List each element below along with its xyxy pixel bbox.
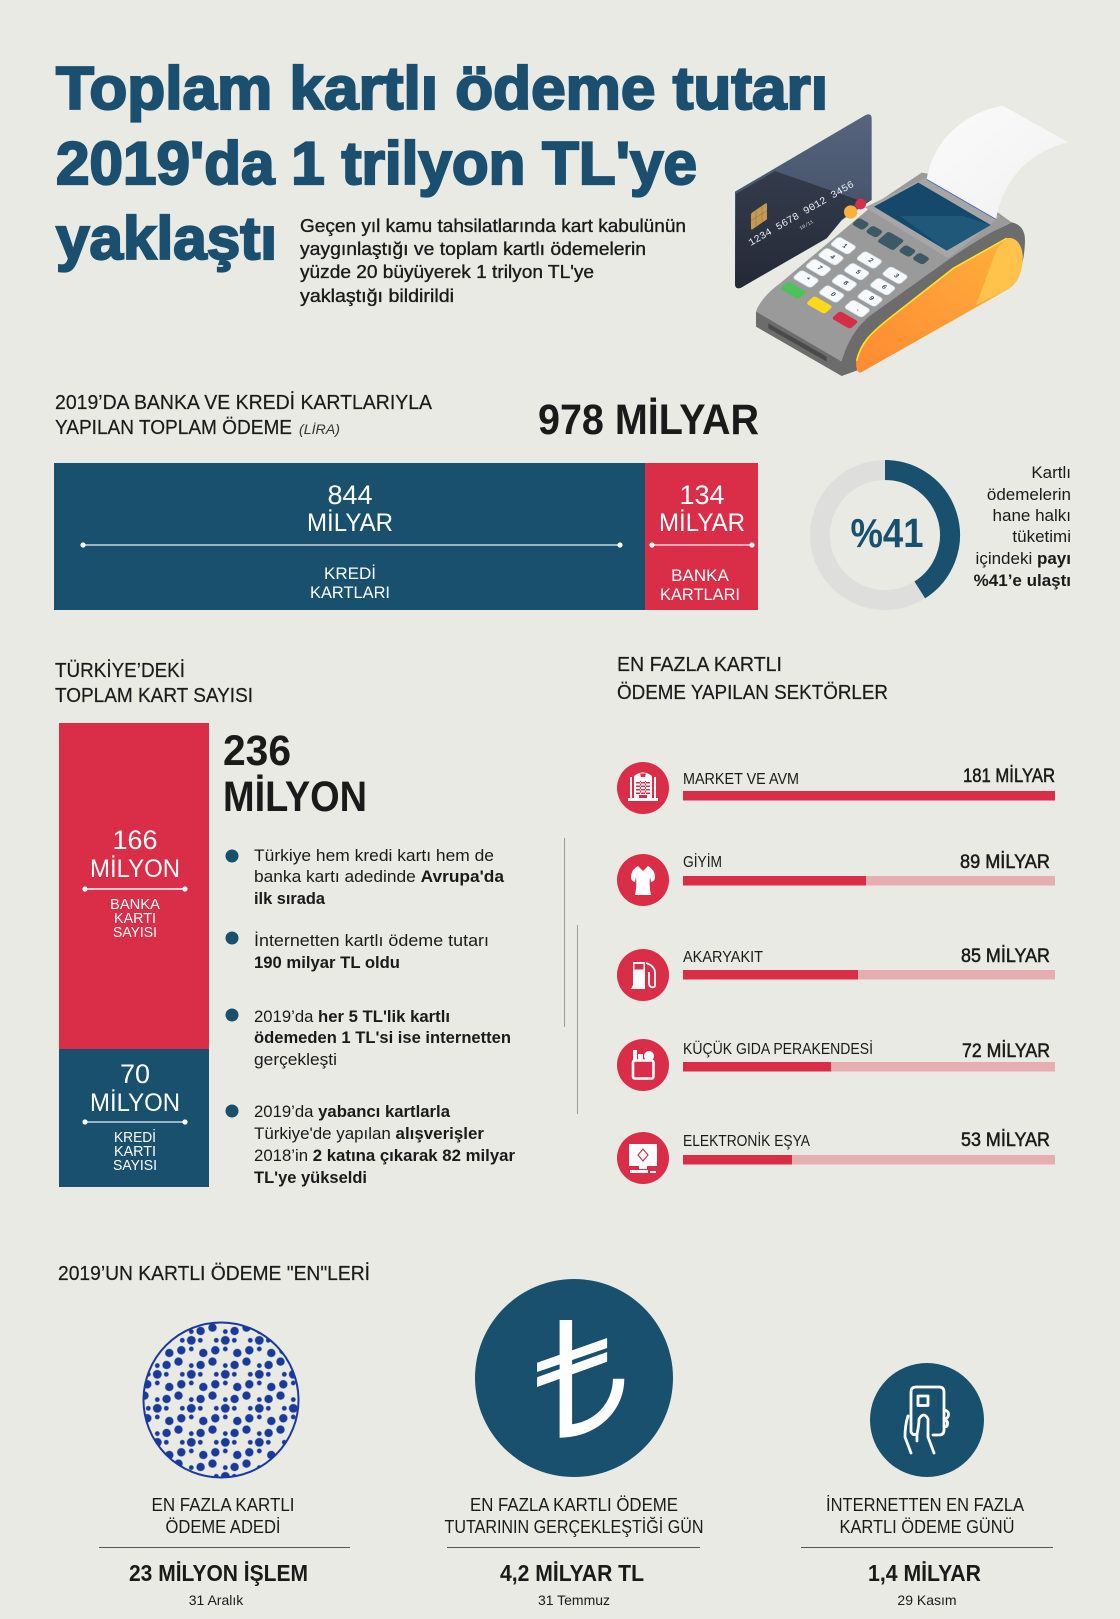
debit card count: 166 [112,825,158,855]
debit card segment label: BANKA [671,566,729,585]
sector: fuel [617,946,1055,1001]
credit card count: KARTI [114,1143,156,1160]
sector: small food retail: 72 MİLYAR [962,1041,1050,1062]
sector: fuel: 85 MİLYAR [961,946,1050,967]
credit card count: SAYISI [113,1157,157,1174]
function keys [851,218,930,265]
heading: total cards: TÜRKİYE’DEKİ [55,659,185,682]
credit card: 1234 5678 9012 3456 [747,179,856,249]
donut chart: 41% [820,470,950,600]
credit card count [82,1059,188,1174]
key digits [803,243,901,312]
credit card segment label: KARTLARI [310,583,390,602]
sector: clothing [617,852,1055,906]
record: internet payments: 1,4 MİLYAR [868,1560,981,1586]
credit card segment label: MİLYAR [307,508,393,537]
record: highest amount: 4,2 MİLYAR TL [500,1560,644,1586]
bullet 4: Türkiye'de yapılan alışverişler [254,1124,484,1143]
bullet 4: 2019’da yabancı kartlarla [254,1102,451,1121]
record: highest amount: EN FAZLA KARTLI ÖDEME [470,1495,678,1515]
heading: records of 2019: 2019’UN KARTLI ÖDEME "EN"LERİ [58,1262,370,1285]
credit card [735,114,872,288]
number keys [793,237,908,318]
record: internet payments: 29 Kasım [897,1592,957,1608]
heading: total cards: TOPLAM KART SAYISI [55,685,253,707]
title: Toplam kartlı ödeme tutarı [56,55,828,122]
record: most transactions: 31 Aralık [189,1592,244,1608]
record: highest amount: TUTARININ GERÇEKLEŞTİĞİ GÜN [444,1516,704,1537]
bullet 2 [226,931,489,972]
terminal body [756,173,1025,376]
debit card count [82,825,188,941]
orange grip [856,238,1023,373]
icon: lira symbol [475,1279,673,1477]
sector: market: 181 MİLYAR [963,766,1055,787]
icon: building [617,762,669,814]
heading: total payment: (LİRA) [299,421,340,437]
total cards value: 236 [223,727,291,775]
key digits: 4 [828,254,837,261]
bullet 3: gerçekleşti [254,1050,337,1069]
sector: electronics: 53 MİLYAR [961,1130,1050,1151]
key digits: 7 [815,265,824,272]
icon: hand holding phone [870,1363,984,1477]
donut caption: ödemelerin [987,485,1071,504]
bullet 1: ilk sırada [254,889,326,908]
intro text: yaygınlaştığı ve toplam kartlı ödemelerin [300,239,646,259]
credit card segment label [80,480,623,602]
intro text: yaklaştığı bildirildi [300,286,454,306]
record: internet payments: İNTERNETTEN EN FAZLA [826,1495,1024,1515]
total value: 978 MİLYAR [538,396,759,444]
icon: dotted circle [140,1320,302,1480]
key digits: 5 [854,269,862,276]
debit card segment label: 134 [679,480,725,510]
credit card count: MİLYON [90,1088,180,1117]
debit card segment label: KARTLARI [660,585,740,604]
bullet 4: 2018’in 2 katına çıkarak 82 milyar [254,1146,515,1165]
heading: total payment: 2019’DA BANKA VE KREDİ KARTLARIYLA [55,391,433,414]
key digits: 8 [841,280,850,287]
sector: electronics [617,1130,1055,1184]
debit card segment label: MİLYAR [659,508,745,537]
bullet 3: 2019’da her 5 TL'lik kartlı [254,1007,450,1026]
intro text [300,216,686,306]
heading: sectors: ÖDEME YAPILAN SEKTÖRLER [617,682,888,704]
debit card count: MİLYON [90,854,180,883]
key digits: 0 [829,291,837,298]
donut caption: %41’e ulaştı [974,571,1071,590]
donut caption: hane halkı [993,506,1071,525]
heading: total payment: YAPILAN TOPLAM ÖDEME [55,417,292,439]
donut caption: tüketimi [1012,527,1071,546]
coloured keys [780,281,858,329]
sector: market: MARKET VE AVM [683,771,799,788]
bullet 3: ödemeden 1 TL'si ise internetten [254,1028,511,1047]
credit card count: 70 [120,1059,150,1089]
title: 2019'da 1 trilyon TL'ye [56,130,697,197]
credit card segment label: KREDİ [324,564,376,583]
credit card: 10/11 [799,219,815,232]
total cards value: MİLYON [223,773,367,821]
screen [874,183,991,251]
record: most transactions: 23 MİLYON İŞLEM [129,1560,308,1586]
record: most transactions [99,1495,350,1608]
bullet 2: 190 milyar TL oldu [254,953,400,972]
debit card count: SAYISI [113,924,157,941]
key digits: 3 [892,273,901,279]
donut caption: Kartlı [1031,463,1071,482]
heading: total cards [55,659,253,707]
bullet 3 [226,1007,511,1069]
icon: fuel pump [617,949,669,1001]
total cards value [223,727,367,821]
bullet 1: banka kartı adedinde Avrupa'da [254,867,505,886]
key digits: 6 [880,284,888,291]
bullet 2: İnternetten kartlı ödeme tutarı [254,931,489,950]
record: internet payments [801,1495,1053,1608]
stacked bar: total payment split [54,463,758,610]
heading: sectors: EN FAZLA KARTLI [617,654,782,676]
record: highest amount: 31 Temmuz [538,1592,610,1608]
donut caption [974,463,1071,590]
record: highest amount [444,1495,704,1608]
sector: clothing: 89 MİLYAR [960,852,1050,873]
key digits: * [803,277,811,283]
debit card segment label [649,480,755,604]
title: yaklaştı [56,205,277,272]
icon: computer [617,1132,669,1184]
sector: small food retail: KÜÇÜK GIDA PERAKENDESİ [683,1039,873,1058]
icon: shirt [617,854,669,906]
sector: clothing: GİYİM [683,852,722,871]
intro text: yüzde 20 büyüyerek 1 trilyon TL'ye [300,262,594,282]
bullet 1 [226,846,505,908]
sector: small food retail [617,1039,1055,1091]
heading: sectors [617,654,888,704]
debit card count: KARTI [114,910,156,927]
key digits: 2 [866,257,875,264]
key digits: 9 [867,295,876,302]
record: internet payments: KARTLI ÖDEME GÜNÜ [840,1517,1014,1537]
sector: electronics: ELEKTRONİK EŞYA [683,1131,810,1150]
sector: market [617,762,1055,814]
donut caption: içindeki payı [976,549,1071,568]
heading: total payment [55,391,433,439]
bullet 4 [226,1102,515,1187]
key digits: 1 [840,243,849,250]
donut chart: 41%: %41 [850,510,924,556]
sector: fuel: AKARYAKIT [683,949,763,966]
credit card segment label: 844 [327,480,373,510]
record: most transactions: EN FAZLA KARTLI [152,1495,294,1515]
credit card count: KREDİ [114,1128,156,1146]
key digits: . [855,307,862,312]
stacked column: card counts [59,723,209,1187]
record: most transactions: ÖDEME ADEDİ [166,1517,280,1537]
icon: grocery bag [617,1039,669,1091]
receipt paper [927,106,1068,219]
illustration: credit card and POS terminal [735,106,1068,376]
intro text: Geçen yıl kamu tahsilatlarında kart kabulünün [300,216,686,236]
bullet 1: Türkiye hem kredi kartı hem de [254,846,494,865]
title [56,55,828,272]
debit card count: BANKA [110,896,160,913]
bullet 4: TL'ye yükseldi [254,1168,367,1187]
